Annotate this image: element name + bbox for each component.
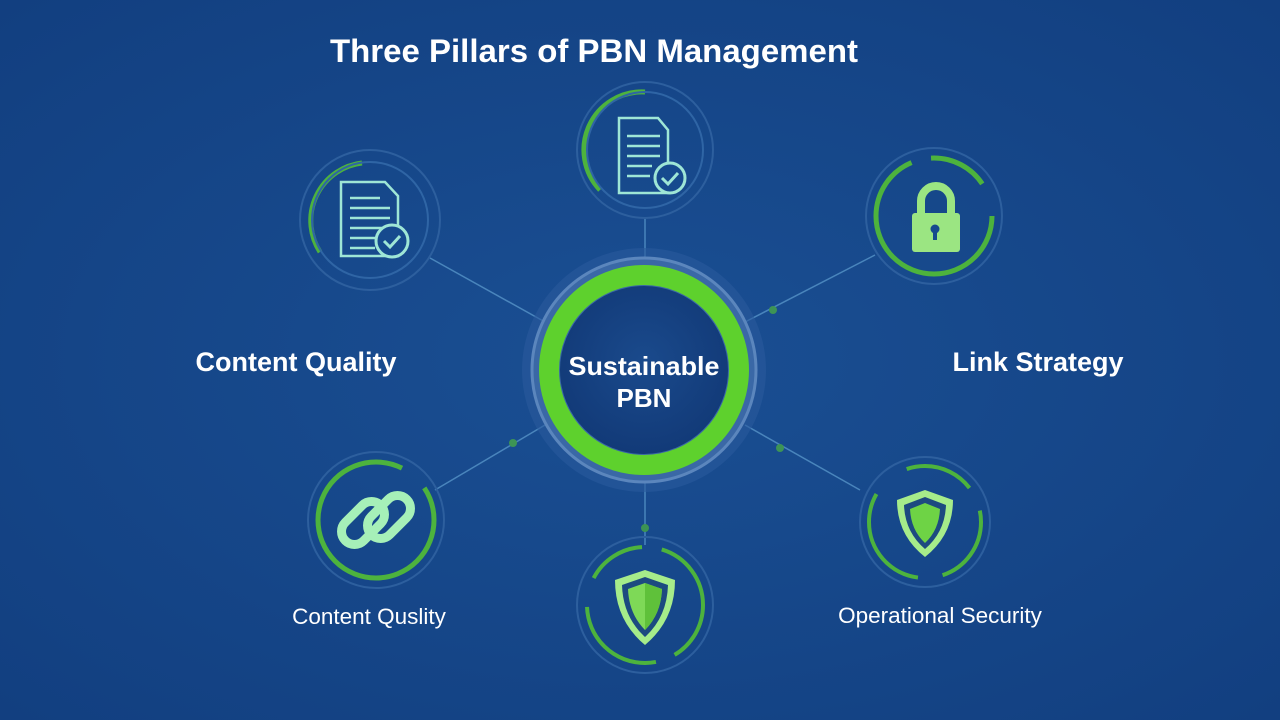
label: content quslity: Content Quslity (292, 604, 447, 629)
icon: chain bottom-left (308, 452, 444, 588)
connector lines (430, 218, 875, 545)
title: Three Pillars of PBN Management (330, 33, 858, 69)
label: content quality: Content Quality (196, 347, 396, 377)
icon: padlock top-right (866, 148, 1002, 284)
central hub: PBN (617, 383, 671, 413)
icon: document top-left (300, 150, 440, 290)
label: operational security: Operational Security (838, 603, 1043, 628)
icon: document top (577, 82, 713, 218)
label: link strategy: Link Strategy (952, 347, 1124, 377)
central hub (522, 248, 766, 492)
icon: shield bottom center (577, 537, 713, 673)
icon: shield bottom-right (860, 457, 990, 587)
central hub: Sustainable (568, 351, 720, 381)
